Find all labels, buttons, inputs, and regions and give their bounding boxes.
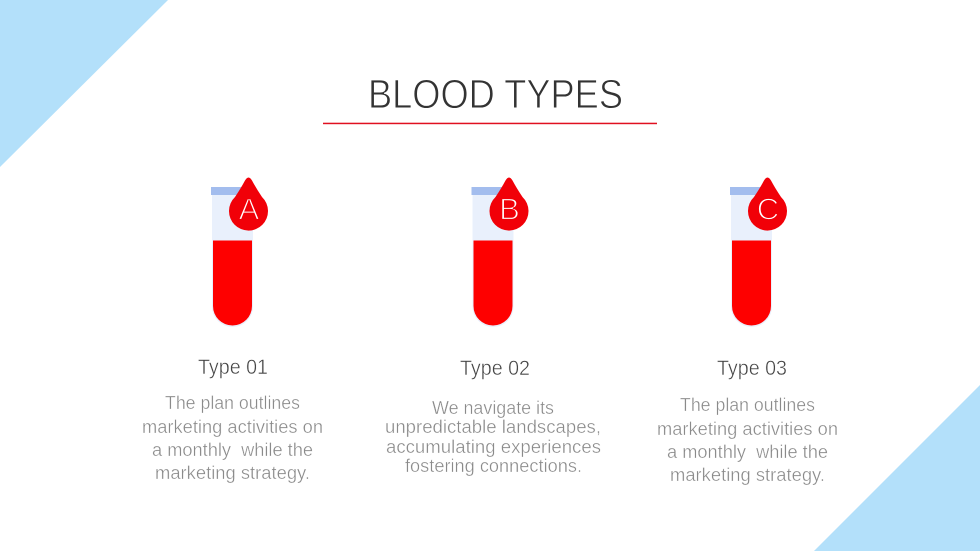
panel: type 03 xyxy=(657,178,843,485)
corner triangle: bottom right xyxy=(814,385,980,551)
heading: type 02: Type 02 xyxy=(460,357,530,380)
description: type 03: marketing strategy. xyxy=(670,465,825,485)
panel: type 02 xyxy=(385,178,606,476)
description: type 02: We navigate its xyxy=(432,398,554,418)
description: type 01: The plan outlines xyxy=(165,393,300,413)
icon: test tube B: B xyxy=(499,192,520,226)
description: type 01: marketing activities on xyxy=(142,417,323,437)
icon: test tube A xyxy=(211,178,268,327)
title underline xyxy=(323,123,657,124)
icon: test tube C xyxy=(730,178,787,327)
heading: type 01: Type 01 xyxy=(198,356,268,379)
description: type 03: marketing activities on xyxy=(657,419,838,439)
icon: test tube C: C xyxy=(757,192,779,226)
title: BLOOD TYPES xyxy=(368,71,623,117)
description: type 01: a monthly while the xyxy=(152,440,313,460)
icon: test tube A: A xyxy=(239,192,260,226)
description: type 01: marketing strategy. xyxy=(155,463,310,483)
icon: test tube B xyxy=(472,178,528,327)
description: type 03: The plan outlines xyxy=(680,395,815,415)
description: type 02: accumulating experiences xyxy=(386,437,601,457)
description: type 02: fostering connections. xyxy=(405,456,582,476)
corner triangle: top left xyxy=(0,0,168,167)
description: type 02: unpredictable landscapes, xyxy=(385,417,601,437)
description: type 03: a monthly while the xyxy=(667,442,828,462)
heading: type 03: Type 03 xyxy=(717,357,787,380)
panel: type 01 xyxy=(142,178,328,483)
